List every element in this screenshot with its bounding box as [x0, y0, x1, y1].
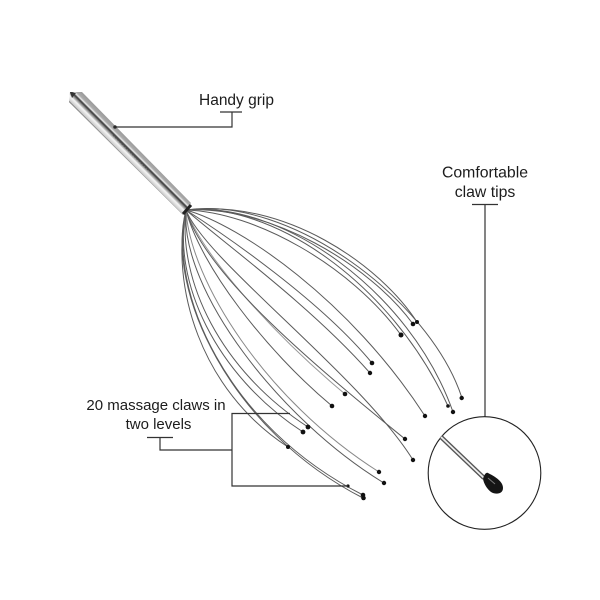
- inset: claw tip detail: [428, 417, 541, 529]
- label: comfortable claw tips: claw tips: [455, 184, 515, 201]
- massager wire claws: [182, 209, 462, 498]
- label: comfortable claw tips: Comfortable: [442, 164, 528, 182]
- label: massage claws: two levels: [126, 416, 191, 433]
- massager handle: [69, 92, 191, 215]
- leader line: claw tips: [472, 204, 498, 417]
- claw tips: [286, 320, 464, 500]
- leader line: handy grip: [114, 112, 242, 128]
- label: massage claws: 20 massage claws in: [86, 397, 226, 414]
- bracket leader: massage claws: [147, 414, 348, 486]
- label: handy grip: Handy grip: [199, 92, 274, 109]
